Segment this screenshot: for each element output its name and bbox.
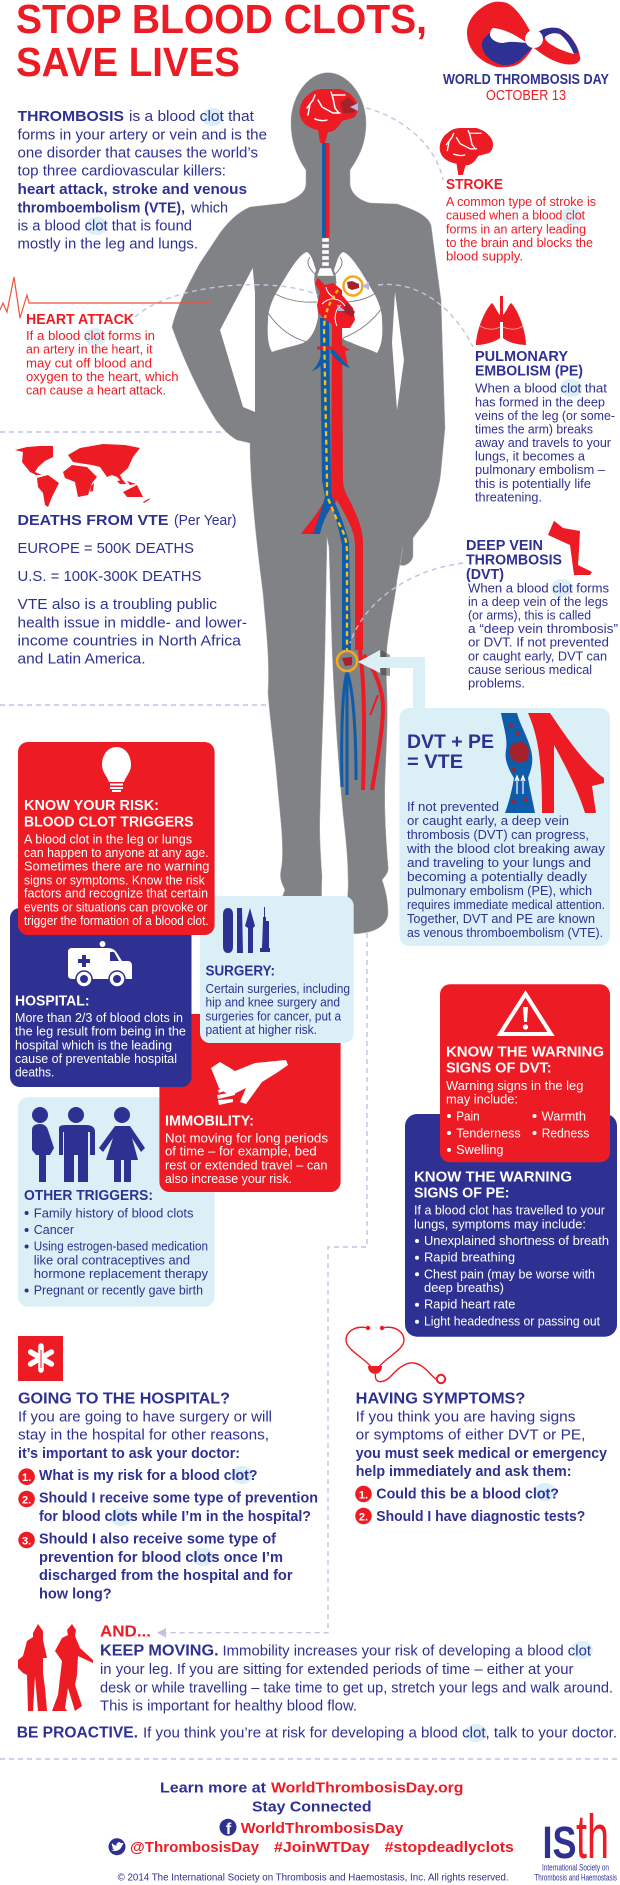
heart attack text (26, 312, 178, 398)
DVT text (466, 538, 618, 691)
icon: world map (15, 444, 150, 507)
VTE text: If not prevented (407, 800, 499, 814)
deaths text: DEATHS FROM VTE (18, 512, 168, 529)
DVT text: or DVT. If not prevented (468, 636, 609, 650)
deaths text: U.S. = 100K-300K DEATHS (18, 568, 202, 585)
keep moving text: KEEP MOVING. (100, 1643, 219, 1660)
text: thrombosis definition: mostly in the leg and lungs. (18, 237, 198, 253)
abdominal branches (312, 348, 350, 371)
DVT warning list: may include: (446, 1093, 518, 1107)
dashed callout curves (135, 108, 473, 643)
symptoms questions: Should I have diagnostic tests? (376, 1508, 585, 1525)
DVT text: cause serious medical (468, 663, 592, 677)
heart (315, 278, 355, 328)
panel: immobility (159, 1014, 341, 1192)
icon: ECG line (0, 277, 211, 318)
risk heading: BLOOD CLOT TRIGGERS (24, 814, 194, 830)
risk text: trigger the formation of a blood clot. (24, 914, 209, 928)
trachea (317, 238, 334, 276)
icon: lungs (476, 296, 526, 345)
PE text: threatening. (475, 491, 542, 505)
footer: social links (108, 1819, 514, 1856)
DVT text: in a deep vein of the legs (468, 595, 608, 609)
DVT warning list: Warning signs in the leg (446, 1079, 583, 1093)
hospital text: More than 2/3 of blood clots in (15, 1011, 183, 1025)
immobility heading: IMMOBILITY: (165, 1113, 254, 1129)
text: thrombosis definition: thromboembolism (VTE), (18, 200, 185, 216)
stroke text: A common type of stroke is (446, 195, 596, 209)
hospital questions (39, 1466, 318, 1602)
brain with clot (300, 89, 358, 143)
icon: plane (211, 1060, 288, 1105)
other triggers list: hormone replacement therapy (34, 1267, 209, 1281)
hospital intro: it’s important to ask your doctor: (18, 1445, 240, 1462)
risk text: Sometimes there are no warning (24, 860, 209, 874)
DVT text: (or arms), this is called (468, 608, 591, 622)
risk text: can happen to anyone at any age. (24, 846, 209, 860)
DVT warning list: Tenderness (456, 1126, 521, 1140)
icon: people (32, 1124, 145, 1182)
icon: leg (548, 521, 592, 575)
text: thrombosis definition: top three cardiovascular killers: (18, 164, 226, 180)
neck vessels (322, 143, 327, 238)
DVT warning list: Redness (542, 1126, 589, 1140)
VTE heading: = VTE (407, 751, 463, 773)
footer: copyright: © 2014 The International Society on Thrombosis and Haemostasis, Inc. All rights reserved. (118, 1873, 509, 1884)
heart attack text: HEART ATTACK (26, 312, 135, 328)
VTE text: becoming a potentially deadly (407, 870, 588, 884)
panel: warning signs of PE (405, 1114, 617, 1337)
hospital text: hospital which is the leading (15, 1038, 172, 1052)
PE text: times the arm) breaks (475, 422, 593, 436)
VTE text (406, 800, 606, 940)
PE warning list: Light headedness or passing out (424, 1315, 600, 1329)
symptoms number badges (355, 1486, 372, 1524)
symptoms number badges: 2. (359, 1511, 368, 1523)
surgery text: Certain surgeries, including (206, 982, 350, 996)
hospital questions: Should I receive some type of prevention (39, 1490, 318, 1507)
risk heading: KNOW YOUR RISK: (24, 798, 159, 814)
logo: ISTH (534, 1803, 617, 1883)
lung clot (344, 276, 369, 296)
stroke text: forms in an artery leading (446, 222, 586, 236)
risk text: factors and recognize that certain (24, 887, 208, 901)
icon: star of life (18, 1336, 63, 1381)
deaths text: EUROPE = 500K DEATHS (18, 540, 194, 557)
deaths text: and Latin America. (18, 651, 146, 668)
text: thrombosis definition: is a blood clot that (129, 109, 254, 125)
DVT text: (DVT) (466, 567, 504, 583)
DVT warning heading: SIGNS OF DVT: (446, 1060, 552, 1076)
human body silhouette (172, 73, 445, 938)
PE text: lungs, it becomes a (475, 450, 585, 464)
symptoms intro: or symptoms of either DVT or PE, (356, 1427, 585, 1444)
arrow: DVT + PE pointer (358, 650, 425, 708)
DVT warning heading (446, 1044, 604, 1076)
surgery text: surgeries for cancer, put a (206, 1009, 341, 1023)
icon: warning triangle (500, 994, 551, 1034)
keep moving text: desk or while travelling – take time to get up, stretch your legs and walk around. (100, 1679, 613, 1696)
risk text: events or situations can provoke or (24, 900, 207, 914)
panel: know your risk (18, 742, 215, 935)
icon: facebook: f (226, 1821, 232, 1838)
panel: surgery (200, 896, 354, 1043)
keep moving text: This is important for healthy blood flow. (100, 1697, 357, 1714)
immobility text: of time – for example, bed (165, 1145, 317, 1159)
PE warning list: Unexplained shortness of breath (424, 1234, 609, 1248)
PE warning list: Rapid heart rate (424, 1298, 515, 1312)
hospital intro: If you are going to have surgery or will (18, 1409, 272, 1426)
deaths text: income countries in North Africa (18, 633, 242, 650)
hospital text: deaths. (15, 1066, 54, 1080)
panel: deep vein thrombosis (466, 521, 618, 691)
deaths text (18, 512, 247, 668)
text: be proactive: If you think you’re at risk for developing a blood clot, talk to your doctor. (143, 1724, 617, 1741)
stroke text: STROKE (446, 177, 503, 193)
text: thrombosis definition: heart attack, stroke and venous (18, 182, 247, 198)
PE warning list: Rapid breathing (424, 1251, 515, 1265)
icon: twitter (108, 1838, 126, 1855)
VTE text: with the blood clot breaking away (406, 842, 606, 856)
text: be proactive: BE PROACTIVE. (17, 1724, 138, 1741)
panel: going to the hospital (18, 1336, 318, 1602)
heart attack text: If a blood clot forms in (26, 329, 155, 343)
icon: brain (440, 128, 493, 175)
symptoms intro: help immediately and ask them: (356, 1463, 572, 1480)
DVT warning list (446, 1079, 589, 1157)
symptoms intro (356, 1409, 608, 1480)
DVT text: a “deep vein thrombosis” (468, 622, 618, 636)
VTE text: or caught early, a deep vein (407, 814, 569, 828)
panel: stroke (440, 128, 596, 264)
dashed dividers and connector path (0, 432, 620, 1759)
PE text: away and travels to your (475, 436, 611, 450)
heart attack text: can cause a heart attack. (26, 384, 166, 398)
yellow dashes (324, 290, 347, 650)
DVT text: THROMBOSIS (466, 552, 562, 568)
title (16, 0, 427, 85)
hospital questions: discharged from the hospital and for (39, 1567, 293, 1584)
other triggers list: like oral contraceptives and (34, 1253, 190, 1267)
PE warning heading (414, 1170, 572, 1202)
VTE heading (407, 731, 494, 773)
DVT warning list: Pain (456, 1109, 480, 1123)
DVT warning list: Swelling (456, 1143, 504, 1157)
PE text (475, 349, 615, 505)
footer: learn more (160, 1779, 463, 1816)
deaths text: (Per Year) (174, 512, 236, 529)
hospital questions: how long? (39, 1585, 112, 1602)
icon: artery (528, 713, 604, 813)
VTE heading: DVT + PE (407, 731, 494, 753)
hospital question heading: GOING TO THE HOSPITAL? (18, 1390, 230, 1407)
keep moving text: in your leg. If you are sitting for extended periods of time – either at your (100, 1661, 574, 1678)
other triggers list: Pregnant or recently gave birth (34, 1284, 203, 1298)
heart attack text: may cut off blood and (26, 356, 152, 370)
immobility text: also increase your risk. (165, 1172, 292, 1186)
text: thrombosis definition (18, 108, 267, 253)
text: thrombosis definition: forms in your artery or vein and is the (18, 127, 267, 143)
other triggers list: Cancer (34, 1223, 74, 1237)
icon: ambulance (68, 941, 132, 987)
PE warning heading: KNOW THE WARNING (414, 1170, 572, 1186)
number badges: 1. (22, 1472, 31, 1484)
PE text: When a blood clot that (475, 382, 608, 396)
hospital intro: stay in the hospital for other reasons, (18, 1427, 269, 1444)
logo: World Thrombosis Day (443, 2, 609, 104)
hospital questions: Should I also receive some type of (39, 1531, 277, 1548)
footer: social links: #stopdeadlyclots (385, 1839, 514, 1856)
and heading: AND... (100, 1624, 151, 1641)
PE warning heading: SIGNS OF PE: (414, 1186, 510, 1202)
icon: vein with clot (501, 713, 535, 813)
PE warning list: lungs, symptoms may include: (414, 1217, 586, 1231)
circulatory system (300, 89, 383, 795)
PE text: pulmonary embolism – (475, 463, 605, 477)
symptoms questions (376, 1483, 585, 1525)
VTE text: as venous thromboembolism (VTE). (407, 926, 603, 940)
icon: stethoscope (346, 1326, 445, 1383)
panel: DVT + PE = VTE (400, 708, 610, 946)
symptoms heading: HAVING SYMPTOMS? (356, 1390, 525, 1407)
stroke text (446, 177, 596, 264)
keep moving text (100, 1641, 613, 1714)
immobility text (165, 1131, 328, 1186)
panel: having symptoms (346, 1326, 608, 1525)
heart attack text: an artery in the heart, it (26, 343, 153, 357)
risk text: signs or symptoms. Know the risk (24, 873, 205, 887)
PE warning list: deep breaths) (424, 1281, 504, 1295)
surgery text: hip and knee surgery and (206, 996, 340, 1010)
hospital questions: prevention for blood clots once I’m (39, 1549, 283, 1566)
lower leg veins (342, 670, 356, 795)
deaths text: VTE also is a troubling public (18, 596, 218, 613)
symptoms intro: If you think you are having signs (356, 1409, 575, 1426)
hospital text: the leg result from being in the (15, 1025, 186, 1039)
hospital text (15, 1011, 186, 1080)
lower aorta and vena cava (301, 320, 363, 650)
VTE text: pulmonary embolism (PE), which (407, 884, 592, 898)
risk text (24, 832, 209, 928)
number badges (18, 1468, 35, 1548)
footer: social links: #JoinWTDay (274, 1839, 370, 1856)
hospital text: cause of preventable hospital (15, 1052, 177, 1066)
footer: learn more: Stay Connected (252, 1799, 372, 1816)
hospital questions: What is my risk for a blood clot? (39, 1467, 258, 1484)
PE warning list: If a blood clot has travelled to your (414, 1204, 605, 1218)
keep moving text: Immobility increases your risk of developing a blood clot (222, 1643, 592, 1660)
surgery text: patient at higher risk. (206, 1023, 317, 1037)
title: SAVE LIVES (16, 39, 240, 85)
icon: surgical tools (223, 907, 270, 953)
PE text: has formed in the deep (475, 395, 605, 409)
panel: warning signs of DVT (440, 984, 610, 1162)
number badges: 2. (22, 1494, 31, 1506)
symptoms questions: Could this be a blood clot? (376, 1485, 559, 1502)
immobility text: rest or extended travel – can (165, 1158, 328, 1172)
risk text: A blood clot in the leg or lungs (24, 832, 192, 846)
icon: walking people (18, 1624, 93, 1711)
heart attack text: oxygen to the heart, which (26, 370, 178, 384)
clot at knee (337, 651, 357, 671)
DVT text: DEEP VEIN (466, 538, 543, 554)
logo: ISTH: IS (542, 1817, 576, 1868)
stroke text: blood supply. (446, 250, 523, 264)
other triggers heading: OTHER TRIGGERS: (24, 1188, 153, 1204)
text: thrombosis definition: which (190, 200, 228, 216)
text: thrombosis definition: one disorder that causes the world’s (18, 146, 258, 162)
footer: social links: WorldThrombosisDay (241, 1820, 404, 1837)
PE text: veins of the leg (or some- (475, 409, 615, 423)
PE text: EMBOLISM (PE) (475, 364, 583, 380)
surgery text (206, 982, 350, 1037)
PE warning list: Chest pain (may be worse with (424, 1267, 595, 1281)
lungs (268, 252, 382, 353)
PE text: PULMONARY (475, 349, 568, 365)
logo: World Thrombosis Day: OCTOBER 13 (486, 88, 566, 104)
surgery heading: SURGERY: (206, 964, 275, 980)
PE warning list (414, 1204, 609, 1329)
VTE text: requires immediate medical attention. (407, 898, 605, 912)
DVT warning list: Warmth (542, 1109, 586, 1123)
footer: social links: @ThrombosisDay (130, 1839, 260, 1856)
panel: hospital (10, 908, 192, 1087)
panel: keep moving (18, 1624, 613, 1714)
footer: learn more: Learn more at (160, 1779, 266, 1796)
DVT text: problems. (468, 677, 525, 691)
deaths text: health issue in middle- and lower- (18, 614, 247, 631)
other triggers list: Family history of blood clots (34, 1206, 193, 1220)
VTE text: and traveling to your lungs and (407, 856, 591, 870)
icon: people heads (32, 1107, 130, 1123)
DVT text: When a blood clot forms (468, 581, 609, 595)
VTE text: Together, DVT and PE are known (407, 912, 595, 926)
VTE text: thrombosis (DVT) can progress, (407, 828, 589, 842)
immobility text: Not moving for long periods (165, 1131, 328, 1145)
symptoms number badges: 1. (359, 1489, 368, 1501)
stroke text: to the brain and blocks the (446, 236, 593, 250)
other triggers list (25, 1206, 209, 1298)
body gaps beside arms (220, 268, 404, 412)
panel: pulmonary embolism (475, 296, 615, 505)
icon: facebook (220, 1819, 236, 1838)
number badges: 3. (22, 1535, 31, 1547)
lower leg arteries (360, 650, 383, 790)
icon: light bulb (102, 747, 131, 792)
risk heading (24, 798, 194, 830)
PE text: this is potentially life (475, 477, 591, 491)
DVT warning heading: KNOW THE WARNING (446, 1044, 604, 1060)
other triggers list: Using estrogen-based medication (34, 1240, 208, 1254)
panel: other triggers (18, 1097, 215, 1307)
hospital questions: for blood clots while I’m in the hospital? (39, 1508, 311, 1525)
stroke text: caused when a blood clot (446, 209, 585, 223)
hospital intro (18, 1409, 272, 1462)
symptoms intro: you must seek medical or emergency (356, 1445, 608, 1462)
panel: heart attack (0, 277, 211, 398)
hospital heading: HOSPITAL: (15, 994, 90, 1010)
text: thrombosis definition: is a blood clot that is found (18, 218, 192, 234)
text: thrombosis definition: THROMBOSIS (18, 109, 124, 125)
DVT text: or caught early, DVT can (468, 649, 607, 663)
footer: learn more: WorldThrombosisDay.org (271, 1779, 463, 1796)
panel: deaths from VTE (15, 444, 247, 668)
